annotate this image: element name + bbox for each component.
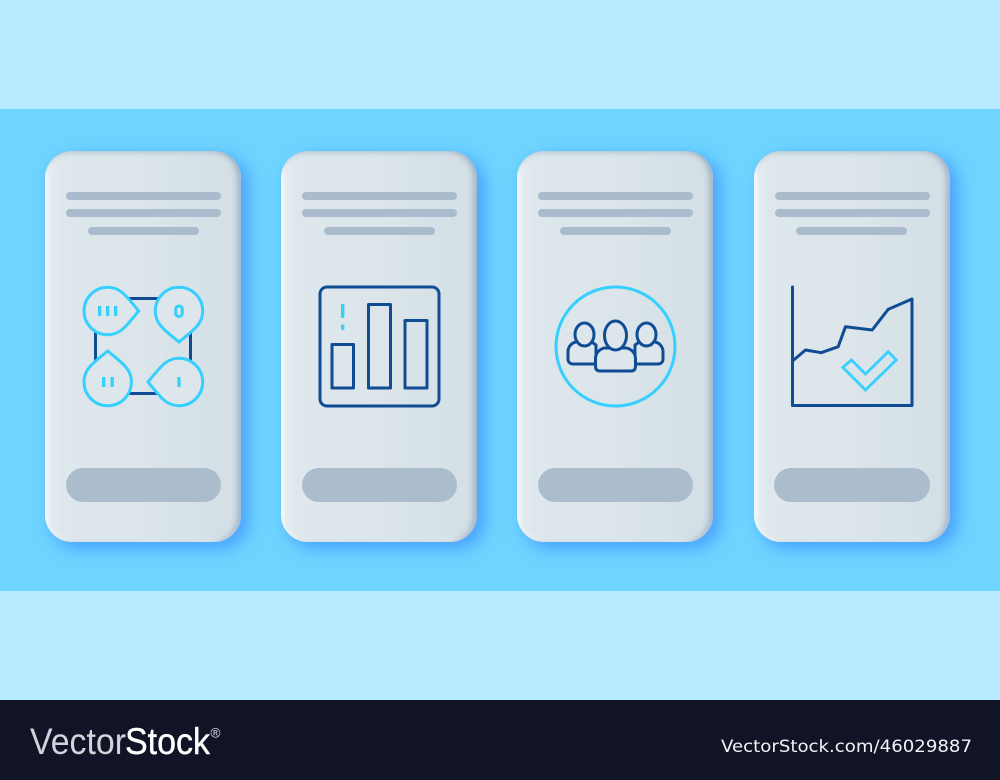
button placeholder xyxy=(538,468,693,502)
icon: square with four numbered drops xyxy=(82,286,204,408)
panel: card 1 infographic steps xyxy=(45,151,241,542)
button placeholder xyxy=(66,468,221,502)
text placeholder line 3 xyxy=(88,227,198,234)
text placeholder line 1 xyxy=(66,192,221,200)
text placeholder line 2 xyxy=(774,209,930,217)
button placeholder xyxy=(302,468,457,502)
footer bar xyxy=(0,700,1000,780)
text placeholder line 1 xyxy=(302,192,457,200)
panel: card 2 bar chart xyxy=(281,151,477,542)
text placeholder line 1 xyxy=(538,192,693,200)
text placeholder line 1 xyxy=(774,192,930,200)
bottom light band xyxy=(0,591,1000,700)
icon: bar chart in frame xyxy=(318,286,440,408)
footer logo wordmark: ® xyxy=(210,726,220,740)
button placeholder xyxy=(774,468,930,502)
text placeholder line 3 xyxy=(324,227,434,234)
panel: card 4 area chart with check xyxy=(754,151,950,542)
text placeholder line 3 xyxy=(560,227,670,234)
text placeholder line 2 xyxy=(538,209,693,217)
text placeholder line 2 xyxy=(66,209,221,217)
footer logo wordmark: VectorStock.com/46029887 xyxy=(721,737,972,757)
middle blue band xyxy=(0,109,1000,591)
text placeholder line 3 xyxy=(796,227,907,234)
footer logo wordmark xyxy=(30,721,972,762)
icon: group of people in circle xyxy=(554,286,676,408)
icon: area chart with check mark xyxy=(790,286,914,407)
footer logo wordmark: Stock xyxy=(125,721,210,762)
panel: card 3 team xyxy=(517,151,713,542)
footer logo wordmark: Vector xyxy=(30,721,126,762)
top light band xyxy=(0,0,1000,109)
text placeholder line 2 xyxy=(302,209,457,217)
